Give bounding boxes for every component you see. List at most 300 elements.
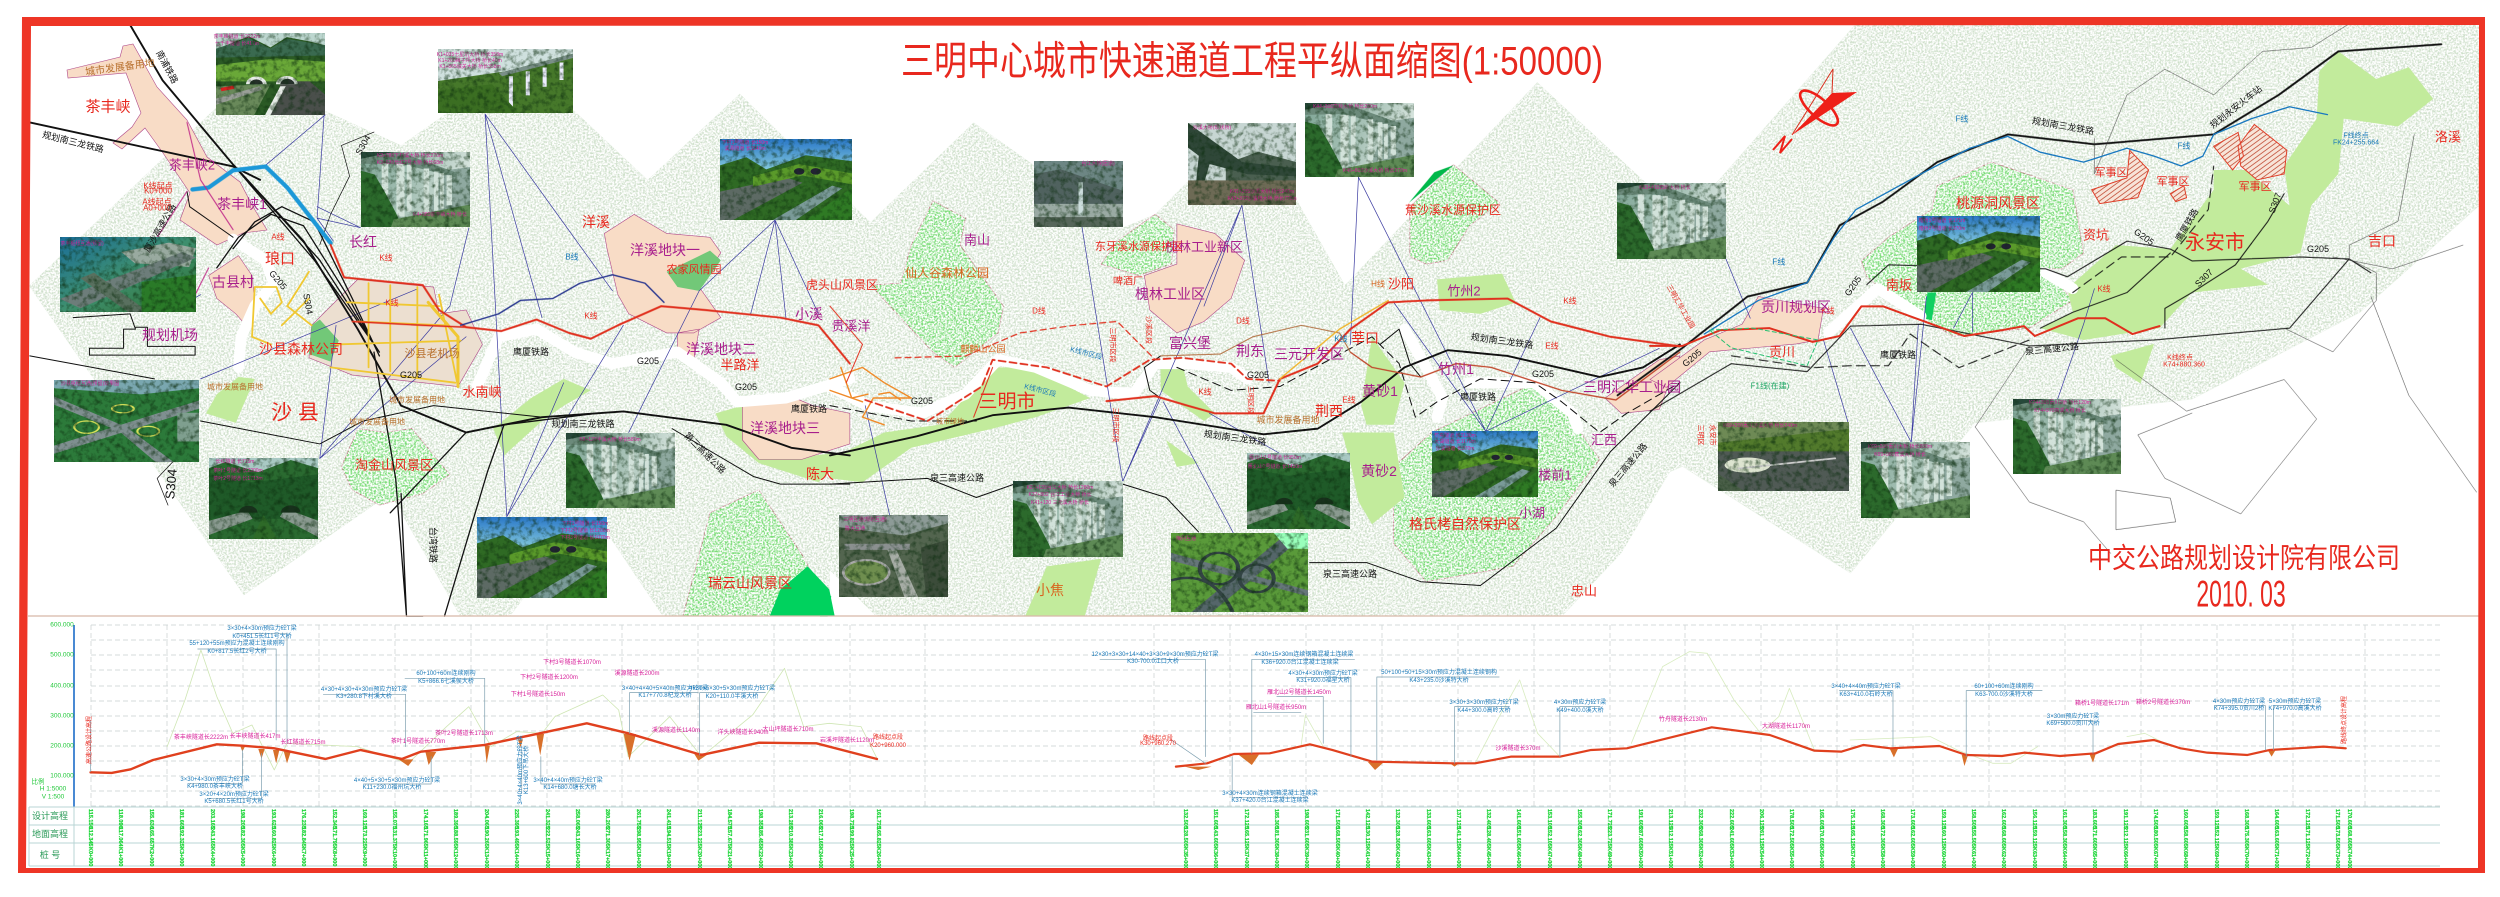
table values: design elevation row: 137.125 bbox=[1455, 809, 1461, 829]
table values: ground elevation row: 162.305 bbox=[1576, 827, 1582, 847]
place-name labels: west section: 陈大 bbox=[806, 466, 834, 482]
place-name labels: central section: 忠山 bbox=[1571, 584, 1597, 598]
table values: ground elevation row: 271.305 bbox=[604, 827, 610, 847]
profile section 1 labels: 3×40+4×40m预应力砼T梁 bbox=[533, 776, 603, 784]
profile section 2 labels: 4×30+15×30m连续钢箱混凝土连续梁 bbox=[1255, 650, 1353, 658]
table values: station row: K18+000 bbox=[635, 847, 641, 869]
place-name labels: central section: D线 bbox=[1236, 316, 1250, 326]
place-name labels: central section: 城市发展备用地 bbox=[1256, 414, 1320, 425]
place-name labels: east section: 鹰厦铁路 bbox=[2173, 206, 2200, 243]
place-name labels: central section: 荆西 bbox=[1315, 403, 1343, 419]
table values: design elevation row: 162.605 bbox=[2000, 809, 2006, 829]
table values: station row: K58+000 bbox=[1879, 847, 1885, 869]
place-name labels: central section: 三元开发区 bbox=[1274, 346, 1344, 362]
profile section 2 labels: 3×30m预应力砼T梁 bbox=[2047, 712, 2099, 720]
place-name labels: east section: 南坂 bbox=[1886, 278, 1912, 292]
photo: tunnel, Taoyuandong: 箱桥1号隧道 长171m bbox=[1919, 217, 1965, 224]
scenic and forest areas (green) bbox=[341, 162, 2084, 616]
route lines: K line, E line, D line, F line bbox=[157, 107, 2328, 421]
table values: ground elevation row: 152.105 bbox=[1546, 827, 1552, 847]
table values: design elevation row: 158.505 bbox=[1970, 809, 1976, 829]
data table: 桩 号 bbox=[40, 849, 60, 860]
place-name labels: west section: 规划机场 bbox=[142, 327, 198, 343]
place-name labels: central section: 黄砂1 bbox=[1362, 383, 1398, 399]
profile section 2 labels: K69+500.0贡川大桥 bbox=[2046, 719, 2100, 727]
photo: tunnel, Taoyuandong: 箱桥2号隧道 长370m bbox=[1919, 225, 1965, 232]
table values: ground elevation row: 141.125 bbox=[1455, 827, 1461, 847]
place-name labels: central section: 楼前1 bbox=[1538, 468, 1572, 482]
table values: ground elevation row: 159.125 bbox=[2031, 827, 2037, 847]
place-name labels: west section: K线起点 bbox=[143, 180, 173, 190]
data table: 地面高程 bbox=[32, 828, 68, 839]
elevation axis: 400.000 bbox=[50, 682, 74, 690]
photo: viaduct, K27 bbox=[1013, 481, 1123, 557]
photo: viaduct, Shaxi: K45+803沙溪大桥 桥长270m bbox=[1343, 167, 1407, 174]
profile section 1 labels: 溪源隧道长1140m bbox=[652, 726, 700, 734]
profile section 2 labels: 竹舟隧道长2130m bbox=[1659, 715, 1707, 723]
photo: tunnel with blue sky, Xiaoxi: 下村1号隧道 长150m bbox=[722, 139, 768, 146]
table values: design elevation row: 191.125 bbox=[2122, 809, 2128, 829]
profile section 1 labels: K0+817.5长红2号大桥 bbox=[207, 647, 267, 655]
photo: viaduct, K27: K41+120 三元溪大桥 桥长 bbox=[1031, 499, 1089, 506]
table values: design elevation row: 153.105 bbox=[1546, 809, 1552, 829]
place-name labels: east section: 桃源洞风景区 bbox=[1956, 195, 2040, 211]
place-name labels: central section: 三明汇华工业园 bbox=[1583, 379, 1681, 395]
table values: design elevation row: 184.575 bbox=[726, 809, 732, 829]
place-name labels: central section: 汇西 bbox=[1591, 432, 1617, 448]
table values: station row: K74+000 bbox=[2346, 847, 2352, 869]
profile section 1 labels: 大山坪隧道长710m bbox=[762, 725, 814, 733]
profile section 1 labels: K4+980.0茶丰峡大桥 bbox=[187, 782, 243, 790]
table values: design elevation row: 225.395 bbox=[513, 809, 519, 829]
table values: ground elevation row: 168.605 bbox=[2000, 827, 2006, 847]
place-name labels: west section: A线起点 bbox=[142, 196, 172, 206]
table values: ground elevation row: 182.845 bbox=[300, 827, 306, 847]
place-name labels: central section: K线 bbox=[1198, 386, 1212, 396]
place-name labels: central section: 南山 bbox=[964, 232, 990, 248]
table values: design elevation row: 168.305 bbox=[2243, 809, 2249, 829]
photo: viaduct, K69 bbox=[1861, 442, 1970, 518]
place-name labels: east section: 军事区 bbox=[2156, 175, 2190, 188]
table values: design elevation row: 152.345 bbox=[331, 809, 337, 829]
photo: tunnel, Changhong: 茶叶2号隧道 长1713m bbox=[213, 475, 263, 482]
place-name labels: east section: K线 bbox=[1821, 306, 1835, 316]
place-name labels: east section: 规划南三龙铁路 bbox=[2031, 115, 2095, 136]
place-name labels: west section: B线 bbox=[565, 252, 579, 262]
table values: station row: K10+000 bbox=[391, 847, 397, 869]
place-name labels: central section: 东牙溪水源保护区 bbox=[1095, 239, 1183, 253]
table values: design elevation row: 198.725 bbox=[848, 809, 854, 829]
table values: station row: K37+000 bbox=[1243, 847, 1249, 869]
table values: station row: K40+000 bbox=[1334, 847, 1340, 869]
table values: station row: K23+000 bbox=[787, 847, 793, 869]
table values: ground elevation row: 193.495 bbox=[513, 827, 519, 847]
place-name labels: west section: K线 bbox=[584, 310, 598, 320]
table values: station row: K68+000 bbox=[2182, 847, 2188, 869]
place-name labels: central section: 竹州2 bbox=[1447, 284, 1481, 298]
table values: design elevation row: 178.505 bbox=[1788, 809, 1794, 829]
table values: station row: K55+000 bbox=[1788, 847, 1794, 869]
table values: ground elevation row: 210.385 bbox=[787, 827, 793, 847]
table values: design elevation row: 241.325 bbox=[544, 809, 550, 829]
table values: ground elevation row: 131.375 bbox=[391, 827, 397, 847]
place-name labels: central section: 泉三高速公路 bbox=[1323, 568, 1377, 579]
table values: design elevation row: 206.125 bbox=[1758, 809, 1764, 829]
profile section 2 labels: 60+100+60m连续刚构 bbox=[1974, 682, 2034, 690]
elevation axis: V 1:500 bbox=[42, 794, 65, 800]
place-name labels: west section: 台湾铁路 bbox=[428, 527, 439, 563]
photo: Shaxi bridge bbox=[1188, 123, 1297, 205]
table values: design elevation row: 159.125 bbox=[1940, 809, 1946, 829]
place-name labels: west section: S304 bbox=[301, 293, 315, 315]
table values: design elevation row: 174.165 bbox=[422, 809, 428, 829]
profile section 1 labels: 4×30+4×30+4×30m预应力砼T梁 bbox=[321, 685, 407, 693]
profile section 2 labels: 箱桥2号隧道长370m bbox=[2136, 698, 2190, 706]
profile section 1 labels: K20+110.0半溪大桥 bbox=[706, 692, 758, 700]
table values: ground elevation row: 168.505 bbox=[1334, 827, 1340, 847]
river corridor (white band) bbox=[233, 239, 2073, 429]
photo: Shaxi bridge: K41+235沙溪大桥 桥长240m bbox=[1230, 188, 1294, 195]
table values: station row: K21+000 bbox=[726, 847, 732, 869]
place-name labels: central section: K线 bbox=[1563, 296, 1577, 306]
photo: blue sky tunnel, Xiacun: 下村2号隧道 长1200m bbox=[560, 527, 610, 534]
place-name labels: central section: 三明市区段 bbox=[1112, 408, 1120, 442]
issuing institute and date: 2010. 03 bbox=[2196, 573, 2286, 615]
place-name labels: east section: 三明区 bbox=[1696, 424, 1704, 446]
table values: design elevation row: 132.405 bbox=[1485, 809, 1491, 829]
photo: viaduct, K74: K74+395贡川2桥 桥长120m bbox=[2029, 399, 2091, 406]
table values: ground elevation row: 163.605 bbox=[1425, 827, 1431, 847]
place-name labels: central section: D线 bbox=[1032, 306, 1046, 316]
small accent shapes: bright green wedges, forest patch, military zones bbox=[309, 125, 2287, 617]
table values: ground elevation row: 223.725 bbox=[1606, 827, 1612, 847]
photo: viaduct, Shaxi bbox=[1305, 103, 1414, 177]
table values: design elevation row: 181.665 bbox=[178, 809, 184, 829]
place-name labels: east section: 永安市 bbox=[2185, 231, 2245, 254]
table values: design elevation row: 161.725 bbox=[875, 809, 881, 829]
photo: Taijiang bridge: 台江大桥(匝道) bbox=[1081, 160, 1115, 167]
table values: ground elevation row: 192.325 bbox=[178, 827, 184, 847]
table values: ground elevation row: 261.125 bbox=[1758, 827, 1764, 847]
place-name labels: east section: F线终点 bbox=[2343, 130, 2369, 140]
table values: station row: K22+000 bbox=[757, 847, 763, 869]
profile section 1 labels bbox=[85, 624, 907, 805]
table values: station row: K61+000 bbox=[1970, 847, 1976, 869]
profile section 1 labels: 茶叶1号隧道长770m bbox=[391, 737, 445, 745]
terrain map base bbox=[30, 24, 2479, 616]
table values: station row: K24+000 bbox=[817, 847, 823, 869]
photo: viaduct group K1 bbox=[437, 49, 573, 113]
table values: design elevation row: 261.755 bbox=[635, 809, 641, 829]
profile section 2 labels: K63+410.0石岭大桥 bbox=[1839, 690, 1893, 698]
profile section 1 labels: 茶丰峡隧道长2222m bbox=[174, 733, 228, 741]
place-name labels: central section: H线 bbox=[1371, 278, 1385, 288]
photo: viaduct group K1: K1+865城关大桥 桥长358m bbox=[439, 63, 501, 70]
profile section 1 labels: K11+230.0福州坑大桥 bbox=[363, 783, 421, 791]
photo: interchange aerial, Chafengxia: 茶丰枢纽互通(预留) bbox=[60, 240, 104, 247]
elevation axis bbox=[32, 622, 74, 807]
photo: tunnel portal K1: 七千丰隧道 长417m bbox=[215, 40, 259, 47]
table values: design elevation row: 198.605 bbox=[1303, 809, 1309, 829]
table values: station row: K65+000 bbox=[2091, 847, 2097, 869]
place-name labels: east section: 永安市 bbox=[1708, 424, 1718, 446]
place-name labels: west section: 鹰厦铁路 bbox=[513, 346, 549, 357]
place-name labels: west section: 城市发展备用地 bbox=[389, 394, 445, 404]
elevation axis: H 1:5000 bbox=[40, 786, 67, 792]
photo: green interchange bbox=[54, 380, 199, 462]
table values: station row: K47+000 bbox=[1546, 847, 1552, 869]
elevation axis: 比例 bbox=[32, 776, 44, 786]
photo: tunnel, Changhong: 长红隧道 长715m bbox=[216, 458, 254, 465]
place-name labels: central section: 富兴堡 bbox=[1169, 335, 1211, 351]
photo: aerial interchange, Chendai bbox=[839, 515, 948, 597]
photo: viaduct, Shaxi K62: K63+410石岭大桥 桥长 bbox=[1639, 184, 1691, 191]
profile section 1 labels: K17+770.8杞龙大桥 bbox=[638, 691, 692, 699]
photo: viaduct, Shaxi: K44+300高岭大桥 桥长280m bbox=[1313, 103, 1377, 110]
place-name labels: east section: G205 bbox=[1680, 347, 1704, 369]
place-name labels: west section: 洋溪地块三 bbox=[750, 420, 820, 436]
place-name labels: east section: F线 bbox=[1773, 256, 1785, 266]
photo: tunnel with blue sky, Xiaoxi bbox=[720, 139, 852, 220]
place-name labels: west section: 小溪 bbox=[795, 306, 823, 322]
profile section 2 labels: K74+395.0贡川2桥 bbox=[2214, 704, 2264, 712]
place-name labels: west section: 长红 bbox=[349, 234, 377, 250]
place-name labels: central section: 蕉沙溪水源保护区 bbox=[1405, 203, 1501, 217]
table values: ground elevation row: 155.505 bbox=[1970, 827, 1976, 847]
table values: design elevation row: 132.505 bbox=[1182, 809, 1188, 829]
place-name labels: central section: 格氏栲自然保护区 bbox=[1409, 516, 1521, 532]
table values: station row: K42+000 bbox=[1394, 847, 1400, 869]
table values: ground elevation row: 173.505 bbox=[2334, 827, 2340, 847]
photo: tunnel blue sky, Louqian: 竹舟隧道 长2130m bbox=[1434, 432, 1476, 439]
yellow town road grids bbox=[252, 272, 461, 387]
orange city-centre roads bbox=[830, 367, 911, 425]
profile section 2 labels: 箱桥1号隧道长171m bbox=[2075, 699, 2129, 707]
table values: design elevation row: 174.505 bbox=[2152, 809, 2158, 829]
table values: design elevation row: 170.605 bbox=[2346, 809, 2352, 829]
profile section 1 labels: 3×40+4×40+5×40m预应力砼T梁 bbox=[622, 684, 708, 692]
place-name labels: east section: 鹰厦铁路 bbox=[1880, 349, 1916, 360]
profile section 2 labels: K37+420.0台江混凝土连续梁 bbox=[1231, 796, 1309, 804]
profile section 1 labels: 岩溪坪隧道长1120m bbox=[820, 736, 874, 744]
profile section 1 labels: 路线起点段 bbox=[873, 733, 903, 741]
table values: ground elevation row: 128.305 bbox=[1394, 827, 1400, 847]
place-name labels: east section: S307 bbox=[2193, 267, 2215, 289]
table values: ground elevation row: 143.605 bbox=[1212, 827, 1218, 847]
table values: design elevation row: 171.725 bbox=[1606, 809, 1612, 829]
place-name labels: east section: G205 bbox=[1843, 274, 1863, 298]
photo: viaduct K3: K3+280下村溪大桥 桥长270m bbox=[377, 152, 443, 159]
table values: ground elevation row: 168.605 bbox=[2346, 827, 2352, 847]
place-name labels: central section: 黄砂2 bbox=[1361, 463, 1397, 479]
profile section 2 labels: K44+300.0高岭大桥 bbox=[1457, 706, 1511, 714]
table values: ground elevation row: 151.605 bbox=[1515, 827, 1521, 847]
issuing institute and date: 中交公路规划设计院有限公司 bbox=[2088, 543, 2400, 574]
table values: ground elevation row: 171.965 bbox=[422, 827, 428, 847]
profile grid bbox=[91, 625, 2440, 807]
table values: station row: K9+000 bbox=[361, 847, 367, 866]
table values: station row: K59+000 bbox=[1909, 847, 1915, 869]
photo: tunnel blue sky, Louqian bbox=[1432, 431, 1538, 497]
profile section 2 labels: 5×30m预应力砼T梁 bbox=[2269, 697, 2321, 705]
table values: design elevation row: 222.605 bbox=[1728, 809, 1734, 829]
table values: design elevation row: 155.305 bbox=[1576, 809, 1582, 829]
place-name labels: west section: 半路洋 bbox=[720, 358, 760, 372]
place-name labels: west section: 城市发展备用地 bbox=[349, 416, 405, 426]
table values: ground elevation row: 199.825 bbox=[848, 827, 854, 847]
profile section 2 labels: 大湖隧道长1170m bbox=[1762, 722, 1810, 730]
place-name labels: west section: 农家风情园 bbox=[666, 262, 722, 276]
profile section 1 labels: K3+280.8下村溪大桥 bbox=[336, 692, 392, 700]
photo: Taijiang bridge bbox=[1034, 160, 1123, 227]
place-name labels: west section: 洋溪地块一 bbox=[630, 242, 700, 258]
photo: tunnel portal K1: 茶丰峡隧道 长2222m bbox=[214, 33, 260, 40]
table values: design elevation row: 185.305 bbox=[1273, 809, 1279, 829]
photo: blue sky tunnel, Xiacun bbox=[477, 517, 610, 598]
table values: station row: K19+000 bbox=[665, 847, 671, 869]
profile section 1 bbox=[91, 633, 877, 798]
table values: ground elevation row: 165.125 bbox=[1243, 827, 1249, 847]
place-name labels: central section: 麒麟山公园 bbox=[960, 343, 1006, 354]
place-name labels: central section: 规划南三龙铁路 bbox=[1470, 331, 1534, 350]
table values: ground elevation row: 112.345 bbox=[87, 827, 93, 847]
table values: design elevation row: 164.605 bbox=[2273, 809, 2279, 829]
table values: ground elevation row: 165.825 bbox=[875, 827, 881, 847]
place-name labels: west section: 规划南三龙铁路 bbox=[551, 418, 615, 429]
table values: station row: K43+000 bbox=[1425, 847, 1431, 869]
table values: station row: K45+000 bbox=[1485, 847, 1491, 869]
photo: viaduct, K74: K74+970高溪大桥 桥长 bbox=[2034, 407, 2086, 414]
table values: station row: K52+000 bbox=[1697, 847, 1703, 869]
table values: ground elevation row: 165.657 bbox=[148, 827, 154, 847]
profile section 2 labels: K30+960.270 bbox=[1140, 741, 1177, 747]
table values: ground elevation row: 181.305 bbox=[1273, 827, 1279, 847]
compass / north arrow bbox=[1773, 69, 1857, 153]
table values: design elevation row: 183.605 bbox=[2091, 809, 2097, 829]
table values: station row: K39+000 bbox=[1303, 847, 1309, 869]
place-name labels: central section: K线市区段 bbox=[1023, 381, 1057, 399]
place-name labels: west section: 贵溪洋 bbox=[831, 318, 871, 334]
table values: design elevation row: 168.305 bbox=[1879, 809, 1885, 829]
table values: ground elevation row: 157.675 bbox=[726, 827, 732, 847]
place-name labels: central section: G205 bbox=[1532, 369, 1554, 379]
table values: design elevation row: 172.125 bbox=[2304, 809, 2310, 829]
place-name labels: west section: S304 bbox=[353, 133, 373, 157]
place-name labels: west section: G205 bbox=[735, 382, 757, 392]
table values: ground elevation row: 241.605 bbox=[1728, 827, 1734, 847]
place-name labels: central section: 莘口 bbox=[1351, 330, 1379, 346]
place-name labels: east section: 贡川规划区 bbox=[1761, 299, 1831, 315]
place-name labels: west section: 第三高速公路 bbox=[682, 430, 728, 476]
table values: design elevation row: 155.636 bbox=[148, 809, 154, 829]
road network: railways and highways bbox=[30, 24, 2477, 616]
profile section 2 labels bbox=[1092, 650, 2348, 804]
table values: station row: K38+000 bbox=[1273, 847, 1279, 869]
profile section 1 labels: 下村2号隧道长1200m bbox=[520, 673, 578, 681]
photo: blue sky tunnel, Xiacun: 下村1号隧道 长150m bbox=[562, 520, 608, 527]
place-name labels: central section: E线 bbox=[1545, 340, 1559, 350]
place-name labels: east section: S307 bbox=[2267, 191, 2283, 215]
profile section 2 labels: 4×30m预应力砼T梁 bbox=[1554, 698, 1606, 706]
place-name labels: west section: S304 bbox=[162, 468, 180, 500]
table values: ground elevation row: 173.225 bbox=[361, 827, 367, 847]
table values: ground elevation row: 223.225 bbox=[696, 827, 702, 847]
table values: station row: K6+000 bbox=[270, 847, 276, 866]
profile section 1 labels: 下村3号隧道长1070m bbox=[543, 658, 601, 666]
place-name labels: west section: G205 bbox=[637, 356, 659, 366]
place-name labels: east section: 三明汇华工业园 bbox=[1665, 283, 1697, 330]
profile section 2 labels: 路线终点设计高程 bbox=[2340, 696, 2348, 744]
place-name labels: west section: 厦沙高速公路 bbox=[141, 202, 178, 254]
table values: design elevation row: 156.125 bbox=[2031, 809, 2037, 829]
table values: ground elevation row: 194.515 bbox=[665, 827, 671, 847]
photo: viaduct group K1: K1+200梅子坪大桥 桥长40m bbox=[438, 57, 502, 64]
table values: station row: K15+000 bbox=[544, 847, 550, 869]
issuing institute and date bbox=[2088, 543, 2400, 615]
profile section 1 labels: 茶叶2号隧道长1713m bbox=[435, 729, 493, 737]
table values: ground elevation row: 160.125 bbox=[1940, 827, 1946, 847]
profile section 1 labels: K13+600下吊大桥 bbox=[522, 746, 530, 794]
profile section 1 labels: 高速公路设计高程 bbox=[85, 716, 93, 764]
table values: ground elevation row: 243.165 bbox=[209, 827, 215, 847]
photo: viaduct K3: K3+630长红2号大桥 桥长68m bbox=[377, 159, 443, 166]
table values: station row: K49+000 bbox=[1606, 847, 1612, 869]
table values: ground elevation row: 128.405 bbox=[1485, 827, 1491, 847]
place-name labels: east section: G205 bbox=[2307, 244, 2329, 254]
profile section 2 labels: K49+400.0溪大桥 bbox=[1556, 706, 1604, 714]
place-name labels: west section: 虎头山风景区 bbox=[806, 278, 878, 292]
place-name labels: west section: 规划南三龙铁路 bbox=[41, 129, 105, 154]
place-name labels: central section: 槐林工业新区 bbox=[1165, 240, 1243, 254]
profile section 2 labels: K74+970.0高溪大桥 bbox=[2268, 704, 2322, 712]
photo: viaduct K3 bbox=[361, 152, 470, 227]
place-name labels: central section: 泉三高速公路 bbox=[930, 472, 984, 483]
table values: design elevation row: 232.305 bbox=[1697, 809, 1703, 829]
table values: station row: K51+000 bbox=[1667, 847, 1673, 869]
profile section 2 labels: K43+235.0沙溪特大桥 bbox=[1409, 676, 1469, 684]
place-name labels: west section: K0+000 bbox=[144, 186, 172, 196]
table values: station row: K36+000 bbox=[1212, 847, 1218, 869]
table values: station row: K48+000 bbox=[1576, 847, 1582, 869]
photo: viaduct K8: K8+120半溪大桥 桥长580m bbox=[579, 436, 641, 443]
place-name labels: east section: K74+880.360 bbox=[2163, 362, 2205, 368]
place-name labels: central section: 城市绿地 bbox=[936, 416, 964, 426]
place-name labels: east section: 规划永安火车站 bbox=[2207, 83, 2264, 130]
table values: station row: K46+000 bbox=[1515, 847, 1521, 869]
profile section 2 bbox=[1100, 652, 2346, 797]
place-name labels: east section: G205 bbox=[2132, 227, 2156, 247]
table values: ground elevation row: 222.525 bbox=[544, 827, 550, 847]
place-name labels: west section: A线 bbox=[271, 232, 285, 242]
photo: viaduct, K74 bbox=[2013, 399, 2121, 474]
table values: ground elevation row: 287.605 bbox=[1637, 827, 1643, 847]
place-name labels: central section: K线 bbox=[1334, 334, 1348, 344]
profile section 1 labels: K14+680.0塘长大桥 bbox=[543, 783, 597, 791]
table values: station row: K35+000 bbox=[1182, 847, 1188, 869]
photo: Meilie interchange bbox=[1171, 533, 1308, 612]
table values: design elevation row: 204.065 bbox=[483, 809, 489, 829]
place-name labels: central section: 泉三高速公路 bbox=[1606, 440, 1649, 489]
table values: ground elevation row: 175.305 bbox=[2243, 827, 2249, 847]
photo: viaduct, K69: K69+500贡川大桥 桥长880m bbox=[1868, 443, 1932, 450]
table values: design elevation row: 141.605 bbox=[1515, 809, 1521, 829]
profile section 1 labels: 3×20+4×20m预应力砼T梁 bbox=[199, 790, 269, 798]
profile section 2 labels: 3×40+4×40m预应力砼T梁 bbox=[1831, 682, 1901, 690]
table values: station row: K57+000 bbox=[1849, 847, 1855, 869]
place-name labels: west section: 洋溪地块二 bbox=[686, 341, 756, 357]
table values: station row: K67+000 bbox=[2152, 847, 2158, 869]
main title: 三明中心城市快速通道工程平纵面缩图(1:50000) bbox=[901, 39, 1603, 83]
